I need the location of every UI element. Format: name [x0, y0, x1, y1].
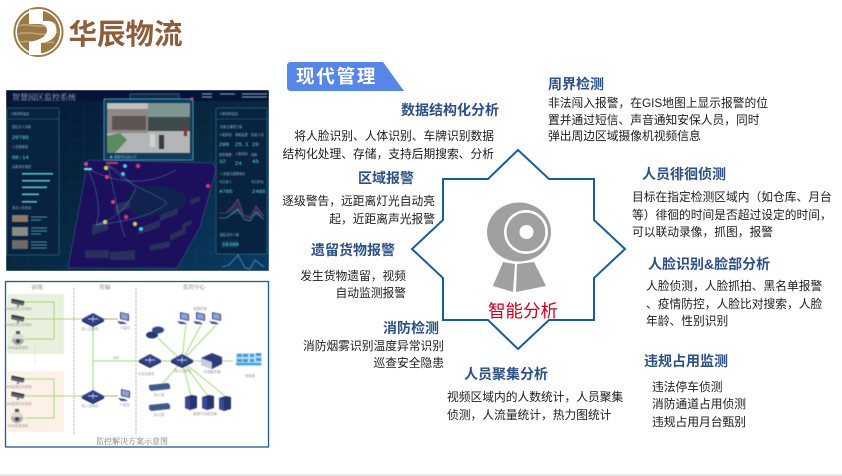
- text block: 消防检测: [303, 320, 444, 370]
- text block: 遗留货物报警: 自动监测报警: [336, 286, 406, 300]
- right side panel: 25.1: [235, 141, 249, 148]
- text block: 人员聚集分析: 人员聚集分析: [464, 366, 548, 382]
- right side panel: 人流量日趋势统计: [220, 171, 246, 176]
- text block: 人员徘徊侦测: 目标在指定检测区域内（如仓库、月台: [632, 190, 832, 204]
- text block: 人员聚集分析: 视频区域内的人数统计，人员聚集: [447, 390, 623, 404]
- right side panel: 45: [252, 158, 259, 165]
- right side panel: 今日外出: [251, 179, 264, 184]
- front-end cameras: [11, 299, 24, 423]
- network links: [25, 302, 233, 418]
- left side panel: 重点人员布控: [12, 205, 32, 210]
- left side panel: 人群态势监控: [10, 111, 30, 116]
- device labels: [4, 306, 256, 428]
- text block: 遗留货物报警: 遗留货物报警: [311, 242, 395, 258]
- device labels: SMB高清红外枪机: [4, 401, 32, 406]
- zone headings: 前端: [31, 283, 43, 291]
- zone headings: [31, 283, 205, 291]
- logo wordmark: 华辰物流: [68, 19, 183, 51]
- right side panel: 园区实时人数: [220, 232, 240, 237]
- text block: 违规占用监测: 违法停车侦测: [652, 380, 722, 394]
- panel: monitoring dashboard screenshot: [6, 90, 269, 271]
- device labels: SMB高清球机: [8, 345, 29, 350]
- zone headings: 监控中心: [183, 283, 205, 291]
- device labels: 防火墙: [154, 412, 165, 417]
- text block: 人脸识别&脸部分析: 人脸识别&脸部分析: [648, 256, 770, 272]
- text block: 区域报警: 起，近距离声光报警: [329, 212, 435, 226]
- text block: 人员徘徊侦测: 人员徘徊侦测: [642, 166, 726, 182]
- text block: 区域报警: [282, 170, 435, 226]
- text block: 违规占用监测: [644, 353, 746, 429]
- text block: 遗留货物报警: [300, 242, 406, 300]
- text block: 消防检测: 消防烟雾识别温度异常识别: [303, 339, 444, 353]
- right side panel: 208: [219, 141, 229, 148]
- left side panel: 20786: [12, 134, 29, 141]
- left side panel: 高频事件类型: [12, 164, 32, 169]
- text block: 区域报警: 区域报警: [358, 170, 414, 186]
- device labels: 万兆交换机: [138, 371, 155, 376]
- text block: 周界检测: 弹出周边区域摄像机视频信息: [548, 129, 701, 143]
- right side panel: 2486: [252, 188, 265, 195]
- right side panel: 人脸抓拍: [219, 132, 232, 137]
- text block: 人脸识别&脸部分析: [646, 256, 822, 328]
- text block: 人脸识别&脸部分析: 年龄、性别识别: [646, 314, 728, 328]
- map area: [68, 160, 216, 268]
- right side panel: 实施主要抓力量: [220, 124, 243, 129]
- text block: 数据结构化分析: 结构化处理、存储，支持后期搜索、分析: [282, 147, 494, 161]
- text block: 违规占用监测: 消防通道占用侦测: [652, 397, 746, 411]
- text block: 人员徘徊侦测: [632, 166, 832, 239]
- device labels: SMB高清红外枪机: [4, 306, 32, 311]
- left side panel: 人流量峰值: [12, 144, 29, 149]
- diagram caption: 监控解决方案示意图: [96, 436, 168, 446]
- device labels: SMB高清球机: [8, 423, 29, 428]
- text block: 违规占用监测: 违规占用月台甄别: [652, 415, 746, 429]
- terminals: [117, 312, 221, 401]
- text block: 周界检测: 周界检测: [548, 76, 604, 92]
- device labels: 管理平台服务器: [193, 411, 217, 416]
- right side panel: 4785: [219, 188, 232, 195]
- right side panel: 10399: [222, 241, 239, 248]
- video wall: [236, 353, 262, 366]
- star label: 智能分析: 智能分析: [488, 301, 558, 321]
- icon: surveillance camera: [487, 202, 551, 292]
- right side panel: 32: [219, 158, 226, 165]
- device labels: 光纤: [113, 355, 120, 360]
- zone backgrounds: [7, 294, 64, 432]
- text block: 周界检测: [548, 76, 768, 143]
- panel: monitoring dashboard screenshot: 智慧园区监控系统: [12, 92, 76, 102]
- text block: 人脸识别&脸部分析: 人脸侦测，人脸抓拍、黑名单报警: [646, 279, 822, 293]
- right side panel: [216, 108, 267, 269]
- text block: 消防检测: 消防检测: [383, 320, 439, 336]
- right side panel: 今日进人: [219, 179, 233, 184]
- text block: 违规占用监测: 违规占用监测: [644, 353, 728, 369]
- section banner: 现代管理: [287, 62, 404, 91]
- right side panel: 人脸布控: [235, 151, 249, 156]
- device labels: 存储服务器: [204, 369, 221, 374]
- text block: 周界检测: 置并通过短信、声音通知安保人员，同时: [548, 113, 760, 127]
- text block: 数据结构化分析: [282, 102, 499, 161]
- device labels: 接入交换机: [82, 403, 99, 408]
- text block: 人员聚集分析: 侦测，人流量统计，热力图统计: [447, 408, 612, 422]
- firewalls: [149, 383, 170, 411]
- text block: 人员聚集分析: [447, 366, 623, 422]
- right side panel: 视频巡逻: [235, 132, 249, 137]
- right side panel: 民技人员: [251, 132, 264, 137]
- text block: 数据结构化分析: 数据结构化分析: [401, 102, 499, 118]
- video feed: ▶ 监控中心出入口: [110, 154, 136, 159]
- text block: 人脸识别&脸部分析: 、疫情防控，人脸比对搜索，人脸: [646, 297, 822, 311]
- text block: 周界检测: 非法闯入报警，在GIS地图上显示报警的位: [548, 96, 768, 110]
- text block: 区域报警: 逐级警告，远距离灯光自动亮: [282, 194, 435, 208]
- servers: [185, 395, 231, 411]
- device labels: 管理终端: [193, 306, 207, 311]
- device labels: 接入交换机: [82, 326, 99, 331]
- central eight-point star: [412, 150, 625, 349]
- video feed: [104, 97, 194, 160]
- device labels: 核心交换机: [175, 368, 192, 373]
- device labels: SMB高清红外枪机: [4, 322, 32, 327]
- left side panel: [7, 108, 59, 255]
- right side panel: 20: [252, 141, 259, 148]
- text block: 人员徘徊侦测: 等）徘徊的时间是否超过设定的时间，: [632, 208, 832, 222]
- right side panel: 周界报警: [219, 152, 233, 157]
- decoder unit: [201, 353, 222, 369]
- right side panel: 消防: [251, 152, 258, 157]
- device labels: SMB高清红外枪机: [4, 384, 32, 389]
- text block: 数据结构化分析: 将人脸识别、人体识别、车牌识别数据: [294, 129, 494, 143]
- device labels: IT监控: [120, 325, 131, 330]
- logo mark: [14, 8, 62, 56]
- switches: [82, 313, 193, 404]
- section banner: 现代管理: 现代管理: [296, 66, 377, 87]
- left side panel: 00:14: [12, 154, 29, 161]
- panel: monitoring solution network diagram: [4, 282, 268, 447]
- text block: 消防检测: 巡查安全隐患: [374, 356, 444, 370]
- left side panel: 园区日人流量: [12, 124, 32, 129]
- storage: [146, 326, 164, 338]
- device labels: IT监控: [120, 402, 131, 407]
- logo: [14, 8, 183, 56]
- text block: 遗留货物报警: 发生货物遗留，视频: [300, 269, 406, 283]
- text block: 人员徘徊侦测: 可以联动录像，抓图，报警: [632, 225, 773, 239]
- right side panel: 人群态势监控: [219, 111, 239, 116]
- zone headings: 传输: [99, 283, 111, 291]
- device labels: 电视墙: [245, 373, 256, 378]
- right side panel: 24: [235, 160, 242, 167]
- device labels: 防火墙: [154, 392, 165, 397]
